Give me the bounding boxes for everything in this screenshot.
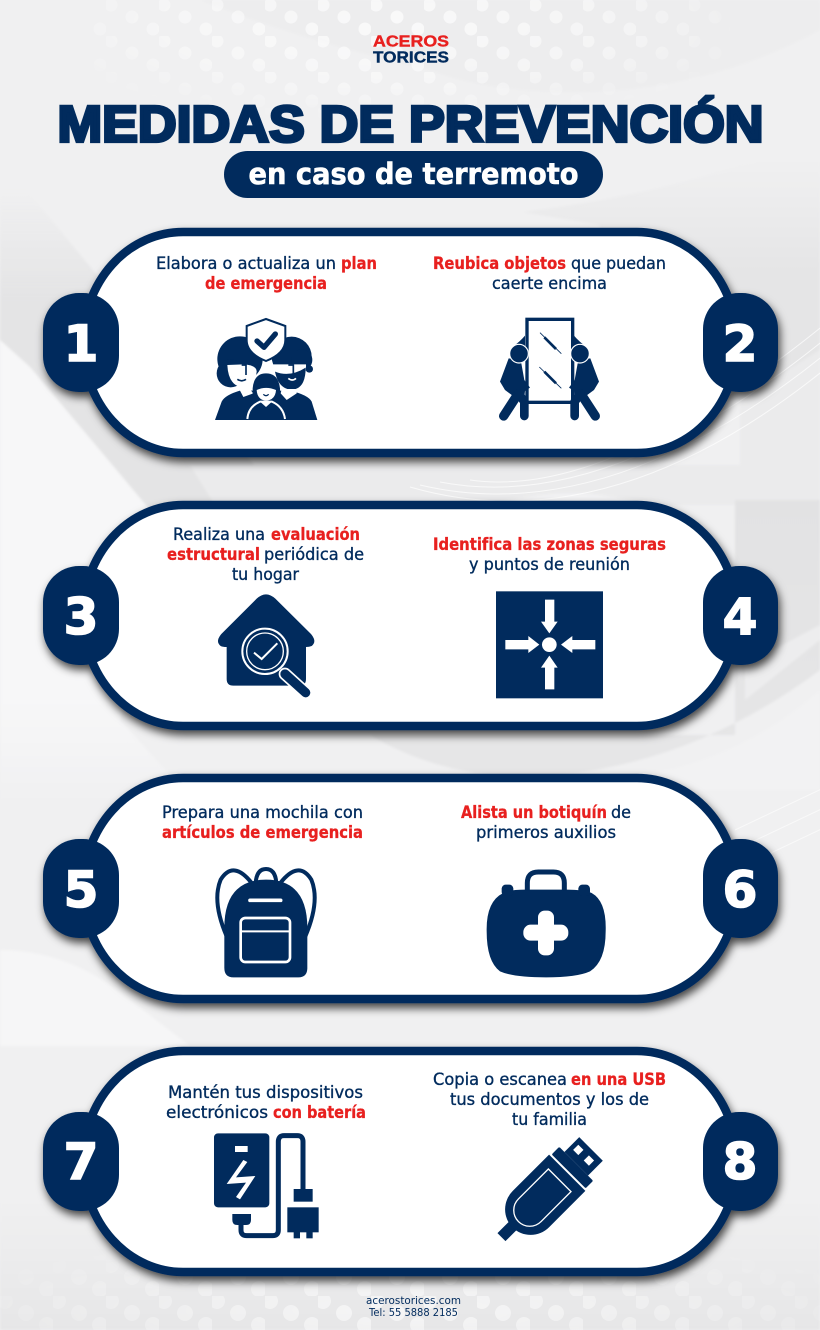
text: step 1: de emergencia bbox=[205, 274, 327, 293]
text: step 8: tu familia bbox=[512, 1110, 587, 1129]
logo bbox=[373, 34, 449, 66]
text: step 3: periódica de bbox=[264, 545, 364, 564]
text: step 7: electrónicos bbox=[166, 1103, 268, 1122]
text: step 2: caerte encima bbox=[492, 274, 607, 293]
number 7: 7 bbox=[64, 1133, 98, 1191]
panel: steps 5 and 6 bbox=[43, 778, 778, 999]
icon: USB drive bbox=[484, 1131, 609, 1256]
icon: assembly point bbox=[496, 591, 603, 698]
panel shape with number badges 3 and 4 bbox=[43, 505, 778, 726]
text: step 2: que puedan bbox=[571, 254, 666, 273]
number 8: 8 bbox=[723, 1133, 757, 1191]
text: step 1 bbox=[156, 254, 377, 293]
text: step 5: artículos de emergencia bbox=[162, 823, 363, 842]
text: step 3: tu hogar bbox=[232, 565, 299, 584]
text: step 6: Alista un botiquín bbox=[461, 803, 607, 822]
number 1: 1 bbox=[64, 315, 98, 373]
panel: steps 3 and 4 bbox=[43, 505, 778, 726]
number 5: 5 bbox=[64, 861, 98, 919]
text: step 6: primeros auxilios bbox=[476, 823, 616, 842]
number 2: 2 bbox=[723, 315, 757, 373]
panel shape with number badges 5 and 6 bbox=[43, 778, 778, 999]
subtitle pill: en caso de terremoto bbox=[248, 157, 578, 191]
number 3: 3 bbox=[64, 588, 98, 646]
logo: ACEROS bbox=[373, 34, 449, 51]
text: step 7 bbox=[166, 1083, 366, 1122]
text: step 8: tus documentos y los de bbox=[450, 1090, 649, 1109]
panel shape with number badges 1 and 2 bbox=[43, 232, 778, 453]
panel: steps 7 and 8 bbox=[43, 1051, 778, 1272]
icon: house inspection bbox=[218, 594, 314, 693]
text: step 2: Reubica objetos bbox=[433, 254, 566, 273]
text: step 4: y puntos de reunión bbox=[469, 555, 630, 574]
text: step 3: Realiza una bbox=[173, 525, 265, 544]
text: step 8: en una USB bbox=[571, 1070, 666, 1089]
text: step 4: Identifica las zonas seguras bbox=[433, 535, 666, 554]
text: step 6: de bbox=[611, 803, 631, 822]
footer contact: Tel: 55 5888 2185 bbox=[368, 1307, 458, 1319]
panel shape with number badges 7 and 8 bbox=[43, 1051, 778, 1272]
text: step 1: plan bbox=[341, 254, 377, 273]
text: step 6 bbox=[461, 803, 631, 842]
text: step 8 bbox=[433, 1070, 666, 1129]
text: step 7: con batería bbox=[273, 1103, 366, 1122]
logo: TORICES bbox=[373, 49, 449, 66]
text: step 3: estructural bbox=[167, 545, 260, 564]
text: step 8: Copia o escanea bbox=[433, 1070, 567, 1089]
footer contact bbox=[366, 1295, 461, 1319]
text: step 5 bbox=[162, 803, 363, 842]
text: step 2 bbox=[433, 254, 666, 293]
icon: backpack bbox=[217, 869, 315, 977]
text: step 7: Mantén tus dispositivos bbox=[168, 1083, 363, 1102]
icon: two people moving a mirror bbox=[500, 319, 599, 416]
icon: first aid kit bbox=[487, 872, 606, 977]
icon: power bank with cable bbox=[214, 1133, 319, 1238]
panel: steps 1 and 2 bbox=[43, 232, 778, 453]
background bbox=[1, 0, 820, 1044]
text: step 3: evaluación bbox=[271, 525, 360, 544]
title: MEDIDAS DE PREVENCIÓN bbox=[58, 96, 764, 152]
text: step 5: Prepara una mochila con bbox=[162, 803, 363, 822]
text: step 4 bbox=[433, 535, 666, 574]
icon: family with shield bbox=[215, 319, 317, 420]
text: step 1: Elabora o actualiza un bbox=[156, 254, 336, 273]
number 6: 6 bbox=[723, 861, 757, 919]
text: step 3 bbox=[167, 525, 364, 584]
subtitle pill bbox=[224, 151, 603, 198]
number 4: 4 bbox=[723, 588, 757, 646]
footer contact: acerostorices.com bbox=[366, 1295, 461, 1307]
